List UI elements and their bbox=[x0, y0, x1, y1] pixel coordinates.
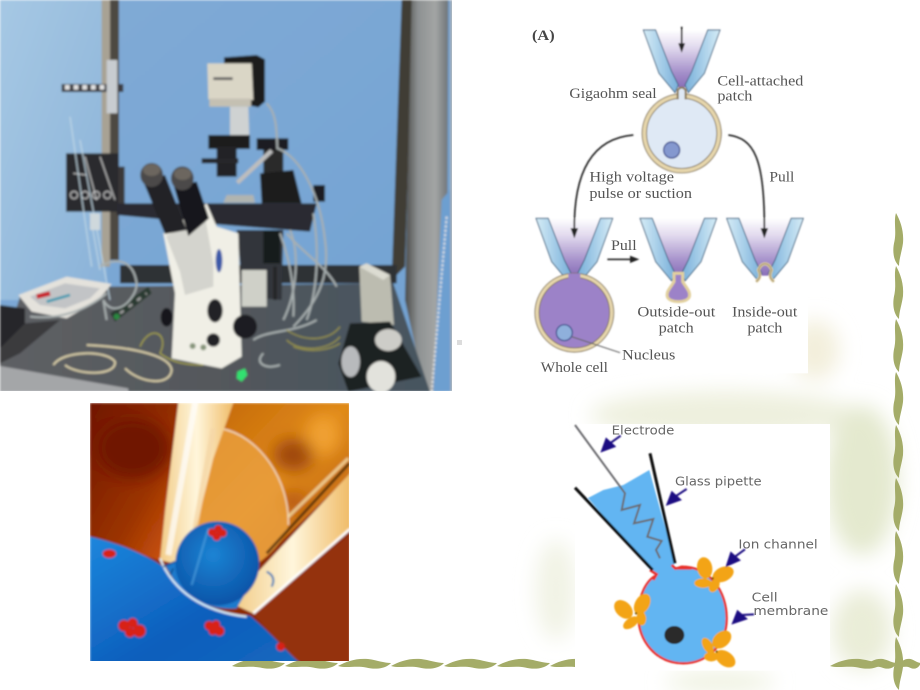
icon: navy arrows bbox=[601, 436, 754, 624]
tubing on wall bbox=[70, 117, 110, 300]
cables bbox=[30, 103, 337, 367]
icon: cell-attached pipette and cell bbox=[643, 30, 720, 171]
icon: red ion channels bbox=[103, 525, 285, 651]
condenser and manipulator bbox=[202, 135, 325, 203]
icon: glass walls bbox=[575, 453, 675, 570]
schematic labels: Cell bbox=[752, 591, 778, 605]
diagram labels: Gigaohm seal bbox=[569, 86, 657, 102]
mottled shading bbox=[97, 415, 340, 512]
dark rear optics bbox=[237, 230, 283, 300]
camera head bbox=[207, 55, 265, 137]
wall rack bbox=[62, 84, 123, 92]
icon: left pipette wall bbox=[160, 403, 233, 565]
controller box bbox=[359, 263, 394, 325]
schematic labels: membrane bbox=[753, 604, 828, 618]
arrow: pull bbox=[607, 256, 639, 263]
panel: patch configurations diagram (A) bbox=[510, 10, 808, 376]
panel: microscope photo bbox=[0, 0, 453, 392]
small grey square bbox=[457, 340, 462, 345]
rear bar bbox=[120, 265, 397, 283]
arrow: top bbox=[678, 27, 685, 53]
border: horizontal vine bbox=[232, 659, 920, 669]
diagram labels: Nucleus bbox=[622, 347, 676, 363]
border: vertical vine bbox=[893, 213, 903, 690]
eyepieces bbox=[140, 163, 209, 236]
schematic labels bbox=[612, 423, 828, 618]
diagram labels: Pull bbox=[611, 238, 637, 254]
arrow: curved to inside-out bbox=[728, 135, 768, 238]
diagram labels: patch bbox=[747, 321, 783, 337]
diagram labels: patch bbox=[659, 321, 694, 337]
schematic labels: Electrode bbox=[612, 423, 674, 437]
diagram labels bbox=[532, 28, 804, 376]
background wash bbox=[536, 320, 898, 690]
panel: labelled electrode schematic bbox=[575, 423, 830, 680]
icon: ion channel petals bbox=[608, 556, 748, 680]
table bbox=[0, 283, 430, 392]
frame and curtain bbox=[102, 0, 453, 392]
coiled tubing bbox=[53, 345, 172, 381]
icon: pipette solution and cell bbox=[587, 470, 727, 663]
diagram labels: patch bbox=[717, 89, 753, 105]
glass dome bbox=[193, 428, 288, 562]
diagram labels: Cell-attached bbox=[717, 73, 804, 89]
diagram labels: Inside-out bbox=[732, 305, 798, 321]
diagram labels: Outside-out bbox=[637, 305, 716, 321]
joystick unit bbox=[338, 322, 422, 392]
tray bbox=[18, 277, 112, 318]
icon: whole cell bbox=[536, 218, 620, 353]
green clip bbox=[237, 368, 247, 382]
microscope body bbox=[161, 203, 257, 368]
black valve panel bbox=[66, 153, 125, 212]
power strip bbox=[110, 287, 152, 322]
arrow: curved to whole cell bbox=[571, 135, 633, 238]
icon: right pipette wall bbox=[235, 473, 350, 613]
icon: blue membrane bulge bbox=[165, 521, 259, 609]
diagram labels: (A) bbox=[532, 28, 555, 44]
stage bbox=[117, 203, 317, 232]
schematic labels: Glass pipette bbox=[675, 475, 762, 489]
diagram labels: Pull bbox=[769, 169, 794, 185]
schematic labels: Ion channel bbox=[738, 537, 818, 551]
icon: inside-out patch bbox=[727, 218, 803, 282]
diagram labels: pulse or suction bbox=[589, 186, 693, 202]
panel: painted pipette on cell bbox=[90, 403, 350, 663]
diagram labels: High voltage bbox=[589, 169, 674, 185]
diagram labels: Whole cell bbox=[541, 360, 608, 376]
icon: outside-out patch bbox=[640, 218, 717, 302]
icon: electrode wire bbox=[575, 425, 662, 558]
